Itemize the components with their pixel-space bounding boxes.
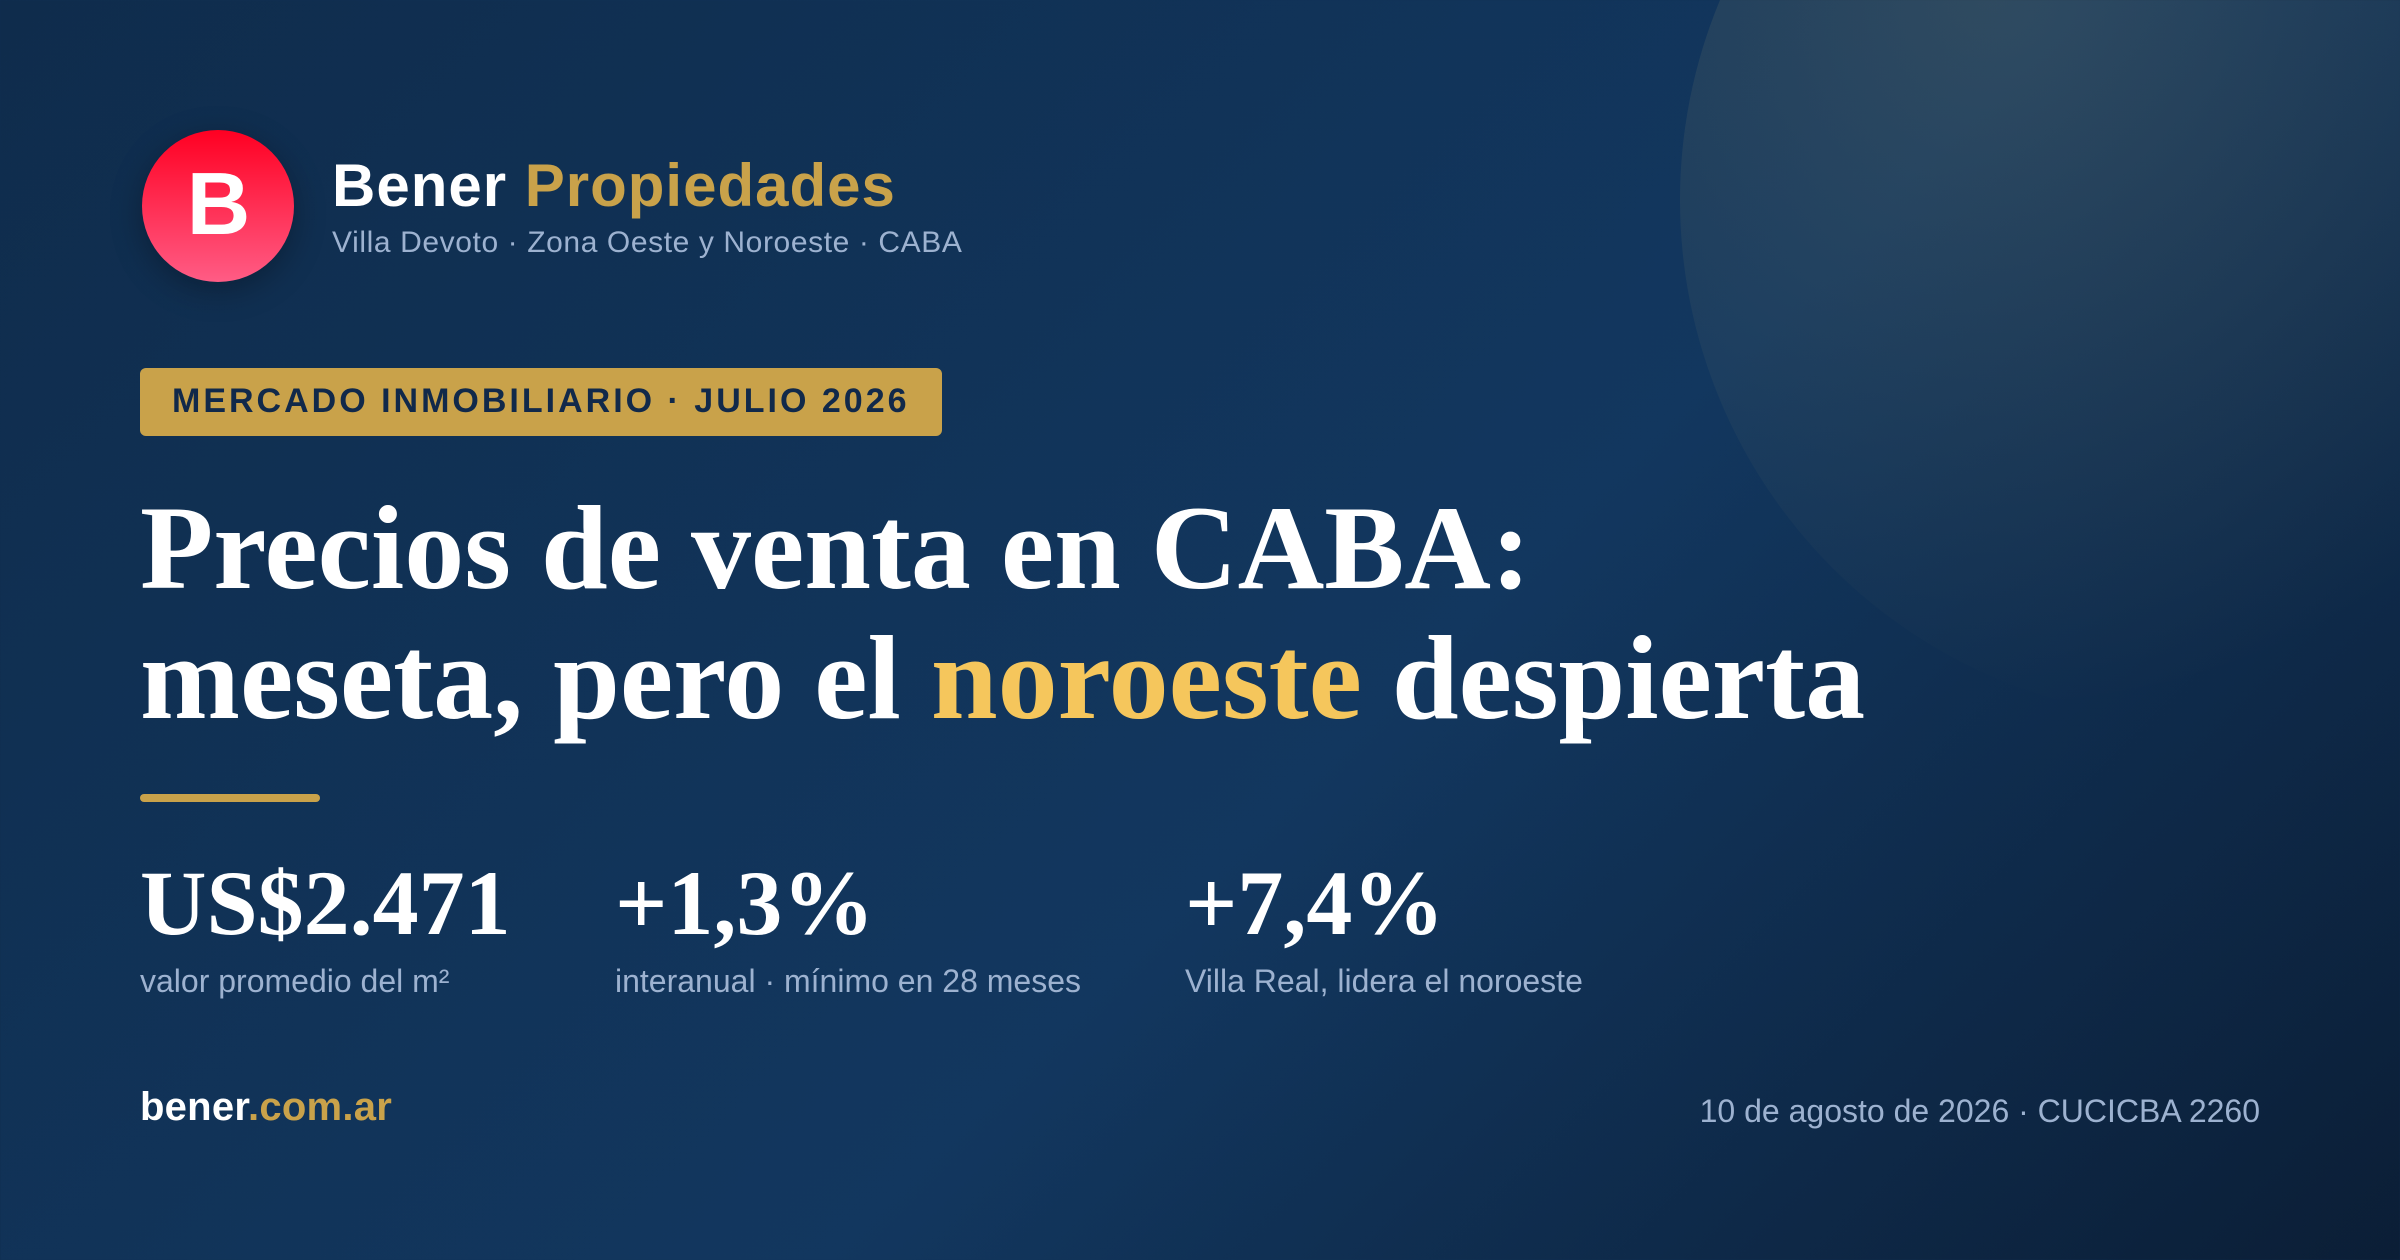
stat 2 bbox=[615, 852, 1081, 999]
stat 3 value: +7,4% bbox=[1185, 852, 1444, 954]
stat 3 label: Villa Real, lidera el noroeste bbox=[1185, 963, 1583, 999]
brand subtitle: Villa Devoto · Zona Oeste y Noroeste · CABA bbox=[332, 226, 963, 259]
stat 1 label: valor promedio del m² bbox=[140, 963, 449, 999]
brand name: Bener Propiedades bbox=[332, 152, 896, 219]
stat 2 value: +1,3% bbox=[615, 852, 874, 954]
stat 1 value: US$2.471 bbox=[140, 852, 511, 954]
logo: red circle with B: B bbox=[187, 154, 250, 253]
title: Precios de venta en CABA: bbox=[140, 481, 1531, 614]
divider bbox=[140, 794, 320, 802]
stat 1 bbox=[140, 852, 511, 999]
decorative circle bbox=[1680, 0, 2400, 720]
website: bener.com.ar bbox=[140, 1085, 392, 1129]
stat 2 label: interanual · mínimo en 28 meses bbox=[615, 963, 1081, 999]
badge bbox=[140, 368, 942, 436]
logo: red circle with B bbox=[142, 130, 294, 282]
date and registration: 10 de agosto de 2026 · CUCICBA 2260 bbox=[1700, 1093, 2260, 1129]
badge: MERCADO INMOBILIARIO · JULIO 2026 bbox=[172, 382, 910, 420]
stat 3 bbox=[1185, 852, 1583, 999]
title: meseta, pero el noroeste despierta bbox=[140, 611, 1865, 744]
title bbox=[140, 481, 1865, 744]
